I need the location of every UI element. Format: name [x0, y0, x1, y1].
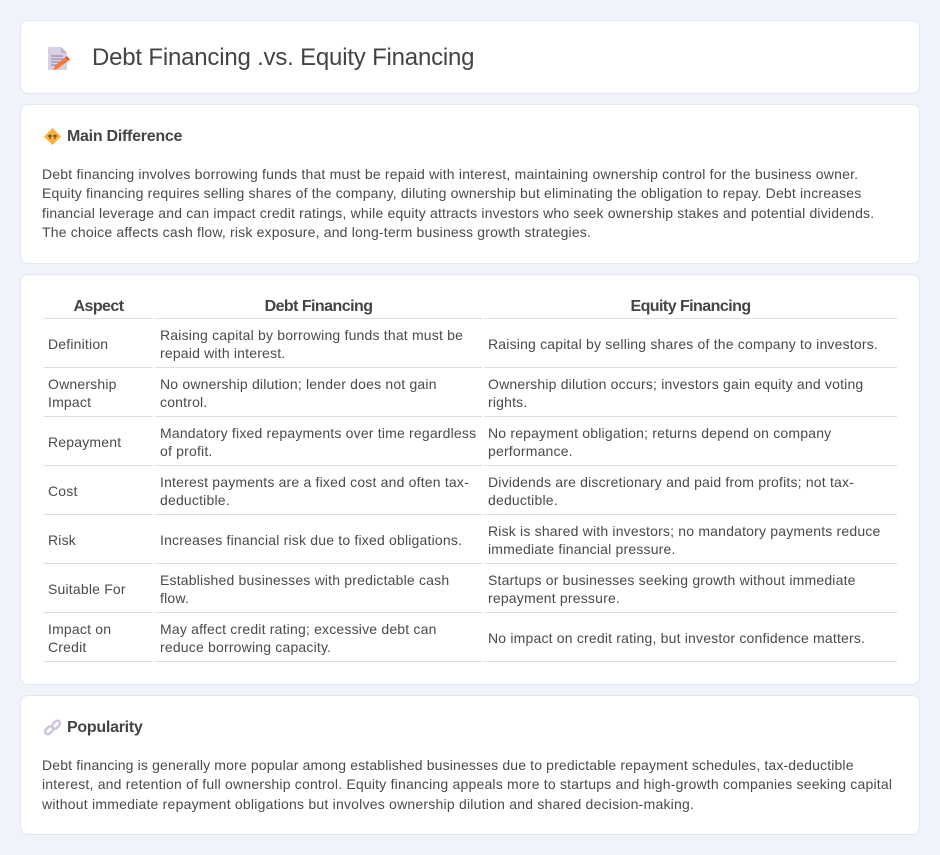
comparison table: control. — [160, 394, 207, 410]
comparison table: Debt Financing — [265, 298, 372, 315]
panel: popularity — [20, 695, 920, 835]
comparison table: Established businesses with predictable cash — [160, 572, 449, 588]
popularity text: without immediate repayment obligations but involves ownership dilution and shared decision-making. — [42, 796, 694, 812]
comparison table: Definition — [48, 336, 108, 352]
comparison table: Interest payments are a fixed cost and often tax- — [160, 474, 469, 490]
comparison table: flow. — [160, 590, 189, 606]
popularity text — [42, 757, 892, 812]
comparison table: of profit. — [160, 443, 212, 459]
comparison table: No impact on credit rating, but investor confidence matters. — [488, 630, 865, 646]
comparison table: performance. — [488, 443, 573, 459]
heading: popularity: Popularity — [67, 719, 143, 736]
icon: chain link — [44, 720, 61, 736]
icon: document with pencil — [48, 47, 70, 70]
comparison table: No ownership dilution; lender does not gain — [160, 376, 437, 392]
comparison table: Suitable For — [48, 581, 126, 597]
comparison table: Ownership dilution occurs; investors gain equity and voting — [488, 376, 863, 392]
panel: header — [20, 20, 920, 94]
main difference text: Debt financing involves borrowing funds that must be repaid with interest, maintaining ownership control for the business owner. — [42, 166, 858, 182]
comparison table: No repayment obligation; returns depend on company — [488, 425, 831, 441]
comparison table: May affect credit rating; excessive debt can — [160, 621, 437, 637]
popularity text: interest, and retention of full ownership control. Equity financing appeals more to startups and high-growth companies seeking capital — [42, 776, 892, 792]
main difference text: The choice affects cash flow, risk exposure, and long-term business growth strategies. — [42, 224, 591, 240]
comparison table: Cost — [48, 483, 78, 499]
title: Debt Financing .vs. Equity Financing — [92, 44, 474, 71]
comparison table: reduce borrowing capacity. — [160, 639, 331, 655]
heading: main difference: Main Difference — [67, 128, 182, 145]
panel: main difference — [20, 104, 920, 264]
comparison table: Mandatory fixed repayments over time regardless — [160, 425, 476, 441]
main difference text: financial leverage and can impact credit ratings, while equity attracts investors who seek ownership stakes and potential dividends. — [42, 205, 874, 221]
comparison table: Equity Financing — [630, 298, 751, 315]
comparison table: repayment pressure. — [488, 590, 620, 606]
comparison table: Impact — [48, 394, 91, 410]
comparison table: Impact on — [48, 621, 111, 637]
popularity text: Debt financing is generally more popular among established businesses due to predictable repayment schedules, tax-deductible — [42, 757, 854, 773]
comparison table: Risk — [48, 532, 76, 548]
comparison table: Raising capital by selling shares of the company to investors. — [488, 336, 878, 352]
panel: comparison table — [20, 274, 920, 685]
comparison table: Startups or businesses seeking growth without immediate — [488, 572, 856, 588]
main difference text — [42, 166, 874, 240]
comparison table: immediate financial pressure. — [488, 541, 676, 557]
comparison table: Raising capital by borrowing funds that must be — [160, 327, 463, 343]
comparison table: Dividends are discretionary and paid from profits; not tax- — [488, 474, 854, 490]
comparison table: Repayment — [48, 434, 121, 450]
comparison table: Credit — [48, 639, 86, 655]
comparison table: Increases financial risk due to fixed obligations. — [160, 532, 462, 548]
comparison table: repaid with interest. — [160, 345, 285, 361]
comparison table: Aspect — [73, 298, 124, 315]
comparison table: rights. — [488, 394, 527, 410]
main difference text: Equity financing requires selling shares of the company, diluting ownership but eliminating the obligation to repay. Debt increases — [42, 185, 861, 201]
comparison table — [44, 298, 897, 662]
comparison table: deductible. — [488, 492, 558, 508]
comparison table: Ownership — [48, 376, 117, 392]
icon: road sign diamond — [44, 128, 61, 145]
comparison table: deductible. — [160, 492, 230, 508]
comparison table: Risk is shared with investors; no mandatory payments reduce — [488, 523, 880, 539]
